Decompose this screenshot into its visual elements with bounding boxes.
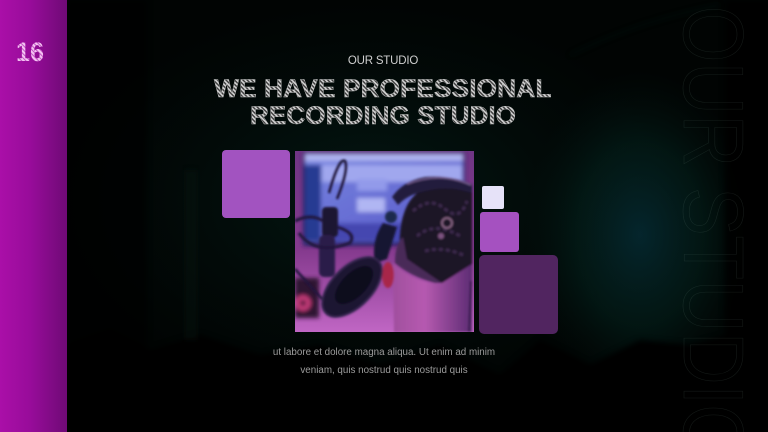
square: large purple left (222, 150, 290, 218)
ear (382, 262, 394, 288)
mic (329, 161, 346, 199)
slide number: 16 (16, 37, 44, 67)
hair (400, 185, 472, 283)
title (214, 75, 551, 130)
earcup (312, 247, 392, 327)
title: RECORDING STUDIO (250, 102, 516, 130)
square: medium purple (480, 212, 519, 252)
square: dark purple large (479, 255, 558, 334)
eyebrow: OUR STUDIO: OUR STUDIO (348, 55, 418, 67)
strut (374, 223, 397, 263)
title: WE HAVE PROFESSIONAL (214, 75, 551, 103)
body text: ut labore et dolore magna aliqua. Ut enim ad minim (273, 347, 495, 358)
neck (393, 263, 472, 332)
photo: man in headphones at microphone (295, 151, 474, 332)
square: pale lavender small (482, 186, 504, 209)
body text (273, 347, 495, 376)
headband (392, 177, 472, 205)
left sidebar with slide number (0, 0, 67, 432)
body text: veniam, quis nostrud quis nostrud quis (300, 365, 468, 376)
